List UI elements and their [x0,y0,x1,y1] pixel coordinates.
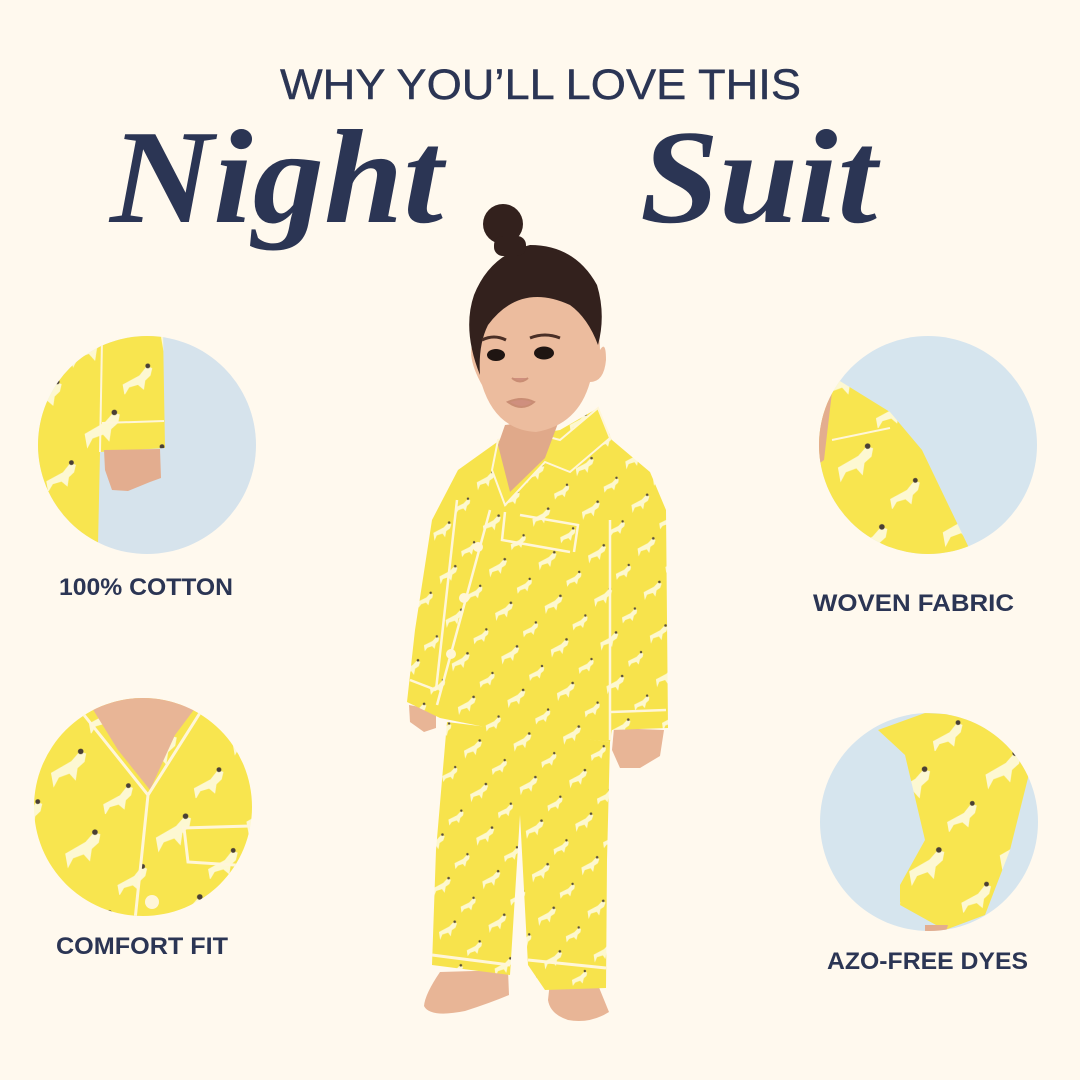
label: azo-free dyes: AZO-FREE DYES [827,948,1028,975]
neck [498,418,560,492]
brows [482,335,560,340]
shirt buttons [446,542,483,659]
panel: azo-free dyes detail photo [820,713,1038,935]
panel: 100% cotton detail photo [30,330,256,560]
heading: Night: Night [108,103,447,251]
child in yellow night suit [407,204,668,1021]
nose and mouth [508,378,534,407]
feet [424,970,609,1021]
panel: woven fabric detail photo [810,336,1037,560]
title: why you'll love this: WHY YOU’LL LOVE THIS [280,61,801,109]
trouser hems [432,955,606,968]
eyes [487,346,554,361]
label: comfort fit: COMFORT FIT [56,933,228,960]
heading: Suit: Suit [640,103,881,251]
label: woven fabric: WOVEN FABRIC [813,590,1014,617]
head [471,290,606,432]
pajama shirt [407,408,668,742]
hands [409,705,664,768]
shirt sleeves and piping [410,500,666,740]
panel: comfort fit detail photo [34,695,252,920]
collar [492,408,610,505]
label: 100% cotton: 100% COTTON [59,574,233,601]
hair [469,245,602,375]
pajama trousers [432,722,610,990]
hair bun [483,204,526,256]
